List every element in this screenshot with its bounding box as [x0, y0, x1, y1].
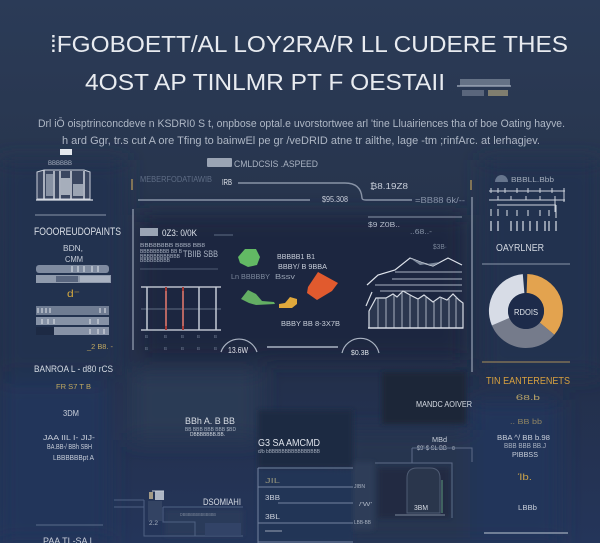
- subtitle: Drl iŌ oisptrinconcdeve n KSDRI0 S t, onpbose optal.e uvorstortwee arl 'tine Lluairiences tha of boe Oating hayve.: [38, 118, 565, 130]
- text: centre labels: [140, 175, 465, 205]
- title: [50, 31, 568, 95]
- panel: centre table: d/b bBBBBBBBBBBBBBBBB: [258, 449, 321, 455]
- title: ⁞FGOBOETT/AL LOY2RA/R LL CUDERE THES: [50, 31, 568, 57]
- text: map labels: [231, 252, 340, 328]
- panel: blueprint diagram: [114, 491, 243, 536]
- text: right stats: BBA ^/ BB b.98: [497, 433, 550, 442]
- panel: centre table: JIBN: [354, 484, 365, 490]
- text: map labels: BBBY BB 8-3X7B: [281, 319, 340, 328]
- panel: centre table: LBB-BB: [354, 520, 371, 526]
- text: left stats: CMM: [65, 255, 83, 264]
- subtitle: [38, 118, 565, 147]
- panel: centre table: G3 SA AMCMD: [258, 438, 320, 449]
- bar chart: B: [181, 346, 184, 351]
- bar chart: B: [214, 346, 217, 351]
- panel: left column: [34, 149, 121, 375]
- bar chart: B: [197, 346, 200, 351]
- gauges and arrow: $0.3B: [351, 348, 369, 357]
- top connector: [132, 179, 472, 372]
- text: right stats: Ίb.: [517, 472, 532, 482]
- text: bottom centre note: BBh A. B BB: [185, 416, 235, 426]
- icon: building: BBBBBB: [48, 161, 72, 167]
- bar chart: TBIIB SBB: [183, 249, 218, 259]
- heading: banroa: BANROA L - d80 rCS: [34, 364, 113, 375]
- icon: gold mark: d⁻: [67, 289, 80, 300]
- text: map labels: Ln BBBBBY: [231, 272, 270, 281]
- panel: centre table: 3BB: [265, 493, 280, 502]
- bar chart: BBBBBBBBB: [140, 258, 171, 264]
- panel: bottom left text: FR S7 T B: [56, 382, 91, 391]
- text: right stats: PIBBSS: [512, 450, 538, 459]
- text: bottom left caption: [36, 525, 103, 543]
- text: gold note: _2 B8. -: [86, 344, 114, 351]
- bar chart: B: [164, 334, 167, 339]
- bar chart: B: [145, 346, 148, 351]
- text: map labels: BBBY/ B 9BBA: [278, 262, 327, 271]
- text: left stats: BDN,: [63, 244, 83, 253]
- grid chart: [489, 188, 565, 231]
- bar chart: B: [214, 334, 217, 339]
- line and area chart: $3B·: [433, 244, 447, 251]
- line and area chart: [366, 217, 463, 328]
- bar chart: BBBBBBBBB BB B: [140, 249, 183, 255]
- title: 4OST AP TINLMR PT F OESTAII: [85, 69, 445, 95]
- bar chart: B: [197, 334, 200, 339]
- text: centre labels: IRB: [222, 178, 232, 187]
- bar chart: BBB8B8BB B8B8 BB8: [140, 243, 205, 249]
- text: centre labels: ₿8.19Z8: [370, 182, 409, 191]
- text: centre labels: MEBERFODATIAWIB: [140, 175, 212, 184]
- bar chart: B: [145, 334, 148, 339]
- icon: title mini graphic: [457, 79, 511, 96]
- heading: centre: [207, 158, 318, 170]
- text: right small label: BBBLL.Bbb: [511, 177, 554, 184]
- panel: bottom left text: BA.BB-/ BBh SBH: [47, 442, 92, 451]
- text: map labels: Bssv: [275, 272, 295, 281]
- text: map labels: BBBBB1 B1: [277, 252, 315, 261]
- panel: centre table: JIL: [265, 476, 280, 485]
- map: coloured regions: [238, 249, 338, 308]
- heading: foundation points: FOOOREUDOPAINTS: [34, 226, 121, 238]
- icon: blueprint mark: [149, 491, 164, 500]
- panel: bottom left text: JAA IIL I- JIJ-: [43, 433, 96, 442]
- panel: centre dashboard: [132, 158, 472, 372]
- heading: gold: TIN EANTERENETS: [486, 376, 570, 387]
- panel: monitor box: $9' $ SL BB - ¤: [417, 445, 455, 452]
- bar chart: B: [164, 346, 167, 351]
- text: bottom centre note: [185, 416, 236, 438]
- bar chart: 0Z3: 0/0K: [162, 228, 197, 238]
- gauges and arrow: 13.6W: [228, 345, 248, 355]
- text: centre labels: $95.308: [322, 195, 348, 204]
- line and area chart: $9 Z0B..: [368, 222, 400, 229]
- icon: dome: [495, 175, 508, 182]
- text: bottom centre note: DBBBBBBB.BB.: [190, 432, 225, 438]
- panel: blueprint diagram: 2.2: [149, 520, 158, 527]
- text: right stats: .. BB bb: [510, 417, 542, 426]
- heading: centre: CMLDCSIS .ASPEED: [234, 159, 318, 170]
- line and area chart: ..68..-: [410, 229, 433, 236]
- text: right stats: BBB BBB BB.J: [504, 441, 546, 450]
- panel: bottom left text: [43, 382, 96, 462]
- text: right stats: Ꮾ8.b: [516, 393, 540, 402]
- panel: blueprint diagram: DBBBBBBBBBBBBB: [180, 512, 216, 517]
- bar chart: B: [181, 334, 184, 339]
- panel: bottom left text: LBBBBBBpt A: [53, 453, 94, 462]
- subtitle: h ard Ggr, tr.s cut A ore Tfing to bainwEl pe gr /veDRID atne tr ailthe, lage -tm ;rinfArc. at lerhagjev.: [62, 135, 540, 147]
- gauges and arrow: [221, 338, 379, 357]
- text: bottom centre note: BB BBB BBB BBB $BD: [185, 427, 236, 433]
- panel: monitor box: MBd: [432, 435, 447, 444]
- panel: monitor box: [375, 399, 472, 518]
- text: right stats: LBBb: [518, 503, 537, 512]
- donut chart: [489, 274, 563, 348]
- heading: overview: OAYRLNER: [496, 242, 544, 254]
- panel: monitor box: 3BM: [414, 503, 428, 512]
- heading: dsomiah: DSOMIAHI: [203, 497, 241, 507]
- panel: bottom left text: 3DM: [63, 408, 79, 418]
- bar chart: [140, 228, 233, 351]
- bar chart: BBBBBBBBBBBB: [140, 254, 181, 260]
- text: centre labels: =BB88 6k/--: [415, 196, 465, 205]
- icon: building: [36, 149, 93, 200]
- donut chart: RDOIS: [514, 307, 538, 317]
- panel: monitor box: MANDC AOIVER: [416, 399, 472, 409]
- table: lower rows: [36, 306, 109, 335]
- table: upper bars: [36, 265, 111, 283]
- panel: centre table: 3BL: [265, 512, 280, 521]
- text: left stats: [63, 244, 83, 264]
- text: right stats: [497, 393, 550, 512]
- panel: right column: [482, 175, 570, 533]
- panel: centre table: [258, 438, 372, 543]
- panel: centre table: /'W': [359, 502, 372, 508]
